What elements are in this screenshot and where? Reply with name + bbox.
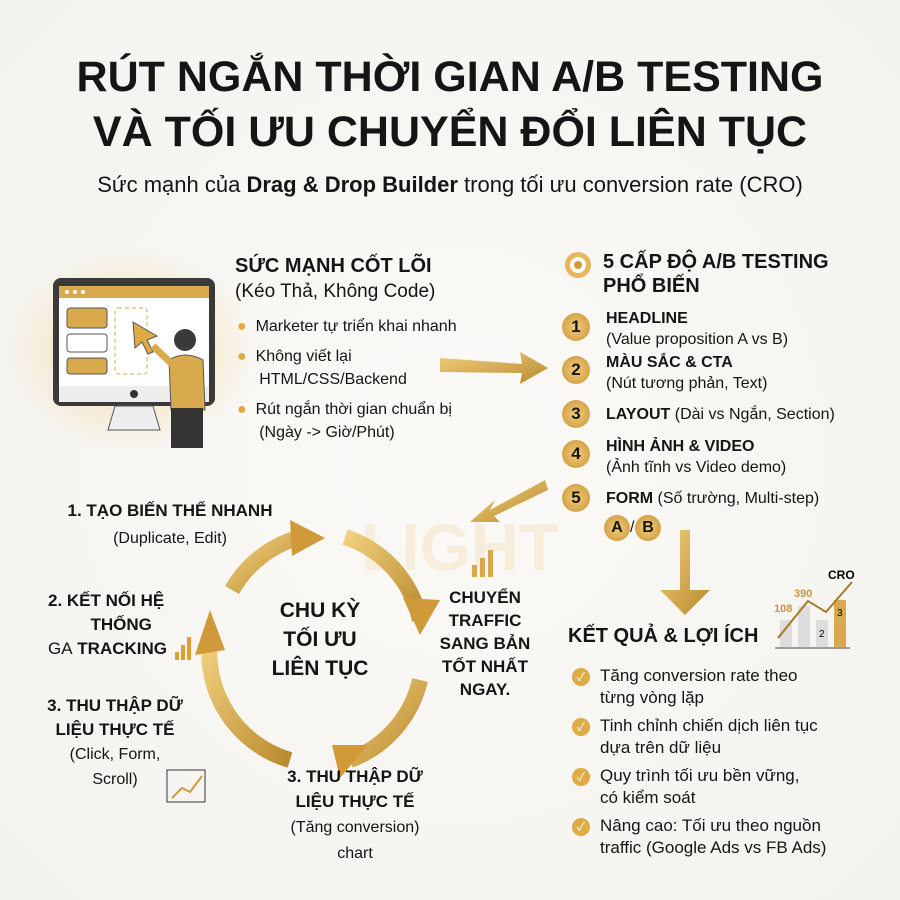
panel: results: ✓ xyxy=(577,820,585,834)
panel: 5 levels: LAYOUT (Dài vs Ngắn, Section) xyxy=(606,406,835,423)
step 3 bottom: LIỆU THỰC TẾ xyxy=(296,792,414,811)
step 4 traffic: SANG BẢN xyxy=(440,634,530,653)
heading: 5 CẤP ĐỘ A/B TESTING xyxy=(603,251,829,273)
chart: CRO growth: CRO xyxy=(828,568,855,582)
panel: 5 levels: 3 xyxy=(571,404,581,423)
chart: CRO growth: 2 xyxy=(819,629,825,640)
panel: 5 levels: B xyxy=(642,519,654,536)
step 3 bottom: (Tăng conversion) xyxy=(291,819,419,836)
panel: 5 levels: 1 xyxy=(571,317,581,336)
panel: 5 levels: / xyxy=(630,519,634,536)
chart: CRO growth xyxy=(774,568,855,648)
bullet list xyxy=(237,318,457,441)
arrow: down-left to cycle xyxy=(470,480,548,522)
icon: monitor with person xyxy=(53,278,215,448)
panel: 5 levels: (Value proposition A vs B) xyxy=(606,331,788,348)
bullet list: (Ngày -> Giờ/Phút) xyxy=(259,424,395,441)
title xyxy=(77,52,823,156)
panel: 5 levels: (Ảnh tĩnh vs Video demo) xyxy=(606,459,786,476)
step 2: 2. KẾT NỐI HỆ xyxy=(48,591,164,610)
title: RÚT NGẮN THỜI GIAN A/B TESTING xyxy=(77,53,823,101)
panel: results: từng vòng lặp xyxy=(600,688,704,707)
cycle center text: TỐI ƯU xyxy=(283,628,357,651)
panel: results: Tăng conversion rate theo xyxy=(600,666,798,685)
panel: 5 levels: HEADLINE xyxy=(606,310,688,327)
step 3 bottom: chart xyxy=(337,845,373,862)
icon: GA xyxy=(175,637,191,660)
benefits list xyxy=(572,666,826,857)
bullet list: HTML/CSS/Backend xyxy=(259,371,407,388)
panel: core power xyxy=(235,254,457,441)
step 1: (Duplicate, Edit) xyxy=(113,530,227,547)
panel: 5 levels: HÌNH ẢNH & VIDEO xyxy=(606,438,754,455)
step 1: 1. TẠO BIẾN THỂ NHANH xyxy=(68,501,272,520)
panel: results: ✓ xyxy=(577,770,585,784)
subtitle: Sức mạnh của Drag & Drop Builder trong tối ưu conversion rate (CRO) xyxy=(97,172,803,197)
step 3 left: 3. THU THẬP DỮ xyxy=(47,696,183,715)
cycle center text xyxy=(272,598,368,680)
bullet list: ● Marketer tự triển khai nhanh xyxy=(237,318,457,335)
level items xyxy=(562,310,835,541)
panel: 5 levels xyxy=(562,250,835,541)
panel: results: dựa trên dữ liệu xyxy=(600,738,721,757)
step 3 left: LIỆU THỰC TẾ xyxy=(56,720,174,739)
heading xyxy=(603,250,829,297)
step 2: THỐNG xyxy=(90,615,152,634)
step 4 traffic: NGAY. xyxy=(460,680,510,699)
step 3 left xyxy=(47,696,183,788)
step 4 traffic xyxy=(440,588,530,699)
panel: results: Quy trình tối ưu bền vững, xyxy=(600,766,799,785)
panel: results: ✓ xyxy=(577,670,585,684)
step 3 bottom: 3. THU THẬP DỮ xyxy=(287,767,423,786)
panel: 5 levels: 5 xyxy=(571,488,581,507)
heading: core power: SỨC MẠNH CỐT LÕI xyxy=(235,255,432,277)
heading: PHỔ BIẾN xyxy=(603,275,700,297)
panel: results: Tinh chỉnh chiến dịch liên tục xyxy=(600,716,818,735)
chart: CRO growth: 108 xyxy=(774,603,792,615)
panel: 5 levels: (Nút tương phản, Text) xyxy=(606,375,767,392)
chart: CRO growth: 3 xyxy=(837,608,843,619)
step 3 left: Scroll) xyxy=(92,771,138,788)
icon: target xyxy=(565,252,591,278)
cycle center text: CHU KỲ xyxy=(280,599,360,622)
bullet list: ● Rút ngắn thời gian chuẩn bị xyxy=(237,401,452,418)
decorative background graphics: LIGHT xyxy=(361,510,559,584)
step 3 bottom xyxy=(287,767,423,862)
step 2 xyxy=(48,591,167,658)
cycle arrows xyxy=(209,536,420,760)
chart: CRO growth: 390 xyxy=(794,588,812,600)
panel: results xyxy=(568,624,826,857)
icon: bars near traffic xyxy=(472,550,493,577)
bullet list: ● Không viết lại xyxy=(237,348,352,365)
icon: chart scroll xyxy=(167,770,205,802)
arrow: down to results xyxy=(660,530,710,615)
arrow: right to levels xyxy=(440,352,548,384)
heading: KẾT QUẢ & LỢI ÍCH xyxy=(568,625,758,647)
step 2: GA TRACKING xyxy=(48,639,167,658)
step 4 traffic: CHUYỂN xyxy=(449,588,521,607)
panel: results: ✓ xyxy=(577,720,585,734)
panel: 5 levels: FORM (Số trường, Multi-step) xyxy=(606,490,819,507)
title: VÀ TỐI ƯU CHUYỂN ĐỔI LIÊN TỤC xyxy=(93,108,807,156)
step 4 traffic: TỐT NHẤT xyxy=(442,657,528,676)
step 1 xyxy=(68,501,272,547)
panel: 5 levels: 2 xyxy=(571,360,581,379)
panel: 5 levels: MÀU SẮC & CTA xyxy=(606,354,733,371)
subheading: (Kéo Thả, Không Code) xyxy=(235,281,435,302)
panel: results: có kiểm soát xyxy=(600,788,695,807)
step 4 traffic: TRAFFIC xyxy=(449,611,521,630)
panel: 5 levels: A xyxy=(611,519,623,536)
panel: results: Nâng cao: Tối ưu theo nguồn xyxy=(600,816,821,835)
cycle center text: LIÊN TỤC xyxy=(272,657,368,680)
panel: results: traffic (Google Ads vs FB Ads) xyxy=(600,838,826,857)
panel: 5 levels: 4 xyxy=(571,444,581,463)
step 3 left: (Click, Form, xyxy=(70,746,160,763)
